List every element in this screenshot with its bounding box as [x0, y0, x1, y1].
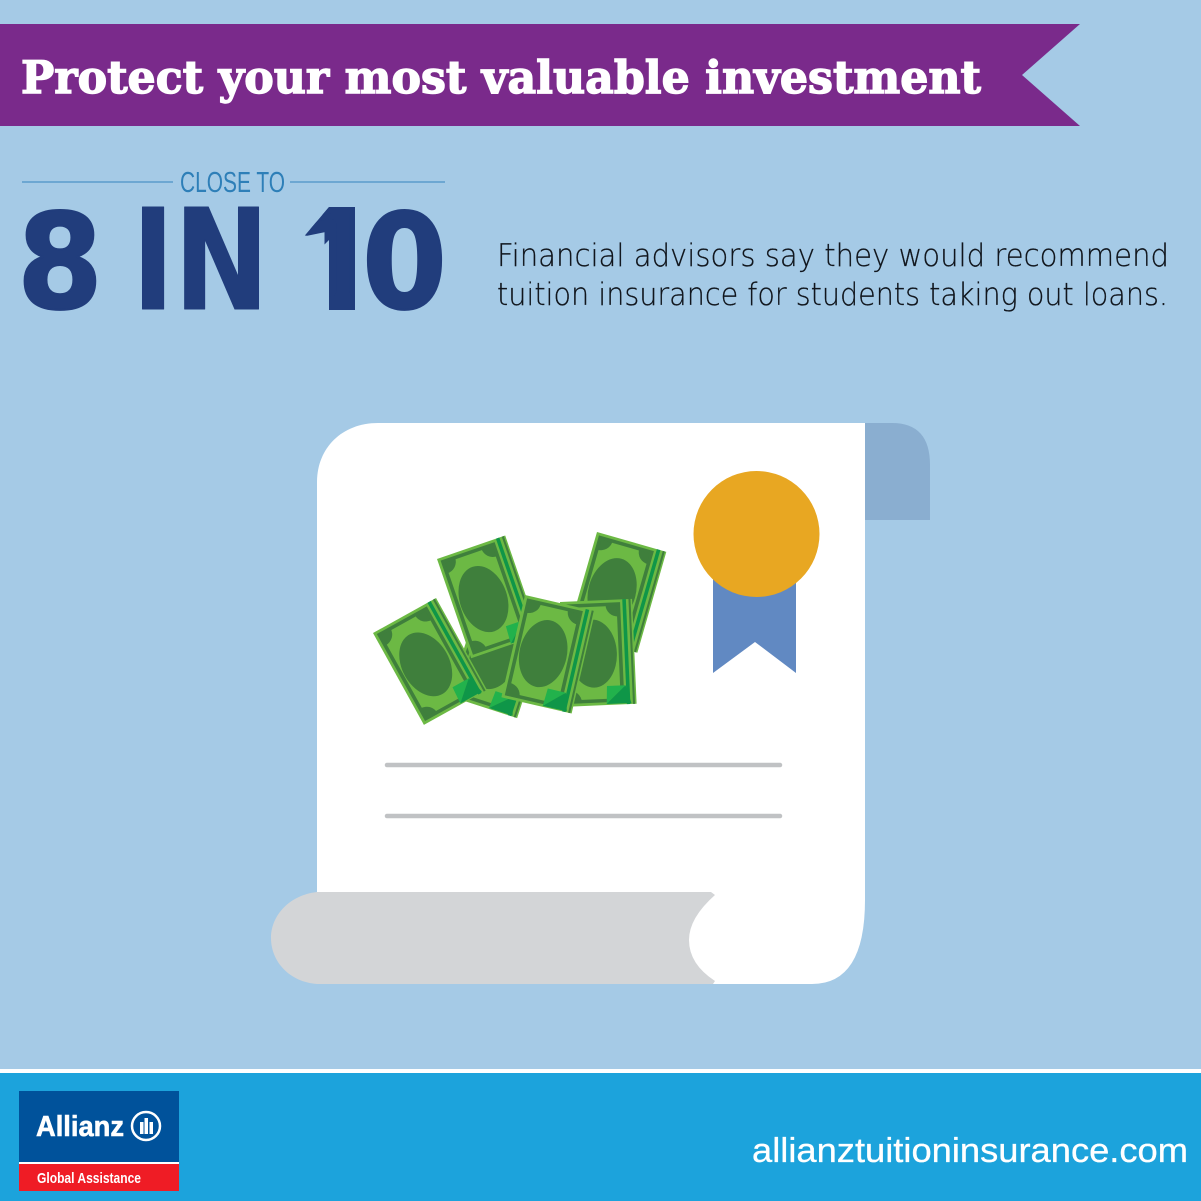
title banner	[0, 24, 1080, 126]
paper	[317, 423, 865, 984]
icon: money bills	[363, 523, 668, 735]
statistic: 8 in 10	[22, 172, 445, 311]
website url: allianztuitioninsurance.com	[752, 1132, 1188, 1170]
big number	[24, 206, 442, 311]
footer	[0, 1069, 1201, 1201]
logo: Allianz Global Assistance	[19, 1091, 179, 1191]
description text	[497, 238, 1169, 313]
label: close to: CLOSE TO	[180, 167, 285, 199]
big number: 0	[362, 186, 447, 340]
scroll top tab	[865, 423, 930, 520]
logo: Allianz Global Assistance: Global Assistance	[37, 1170, 141, 1187]
title: Protect your most valuable investment	[21, 51, 981, 104]
text lines	[387, 765, 780, 816]
description text: Financial advisors say they would recommend	[497, 238, 1169, 274]
big number: 8	[17, 186, 103, 340]
icon: medal	[694, 471, 820, 673]
logo: Allianz Global Assistance: Allianz	[36, 1111, 124, 1143]
illustration: document scroll	[271, 423, 930, 984]
big number: IN	[132, 180, 269, 343]
scroll bottom roll	[271, 892, 715, 984]
big number: 1	[291, 180, 388, 343]
